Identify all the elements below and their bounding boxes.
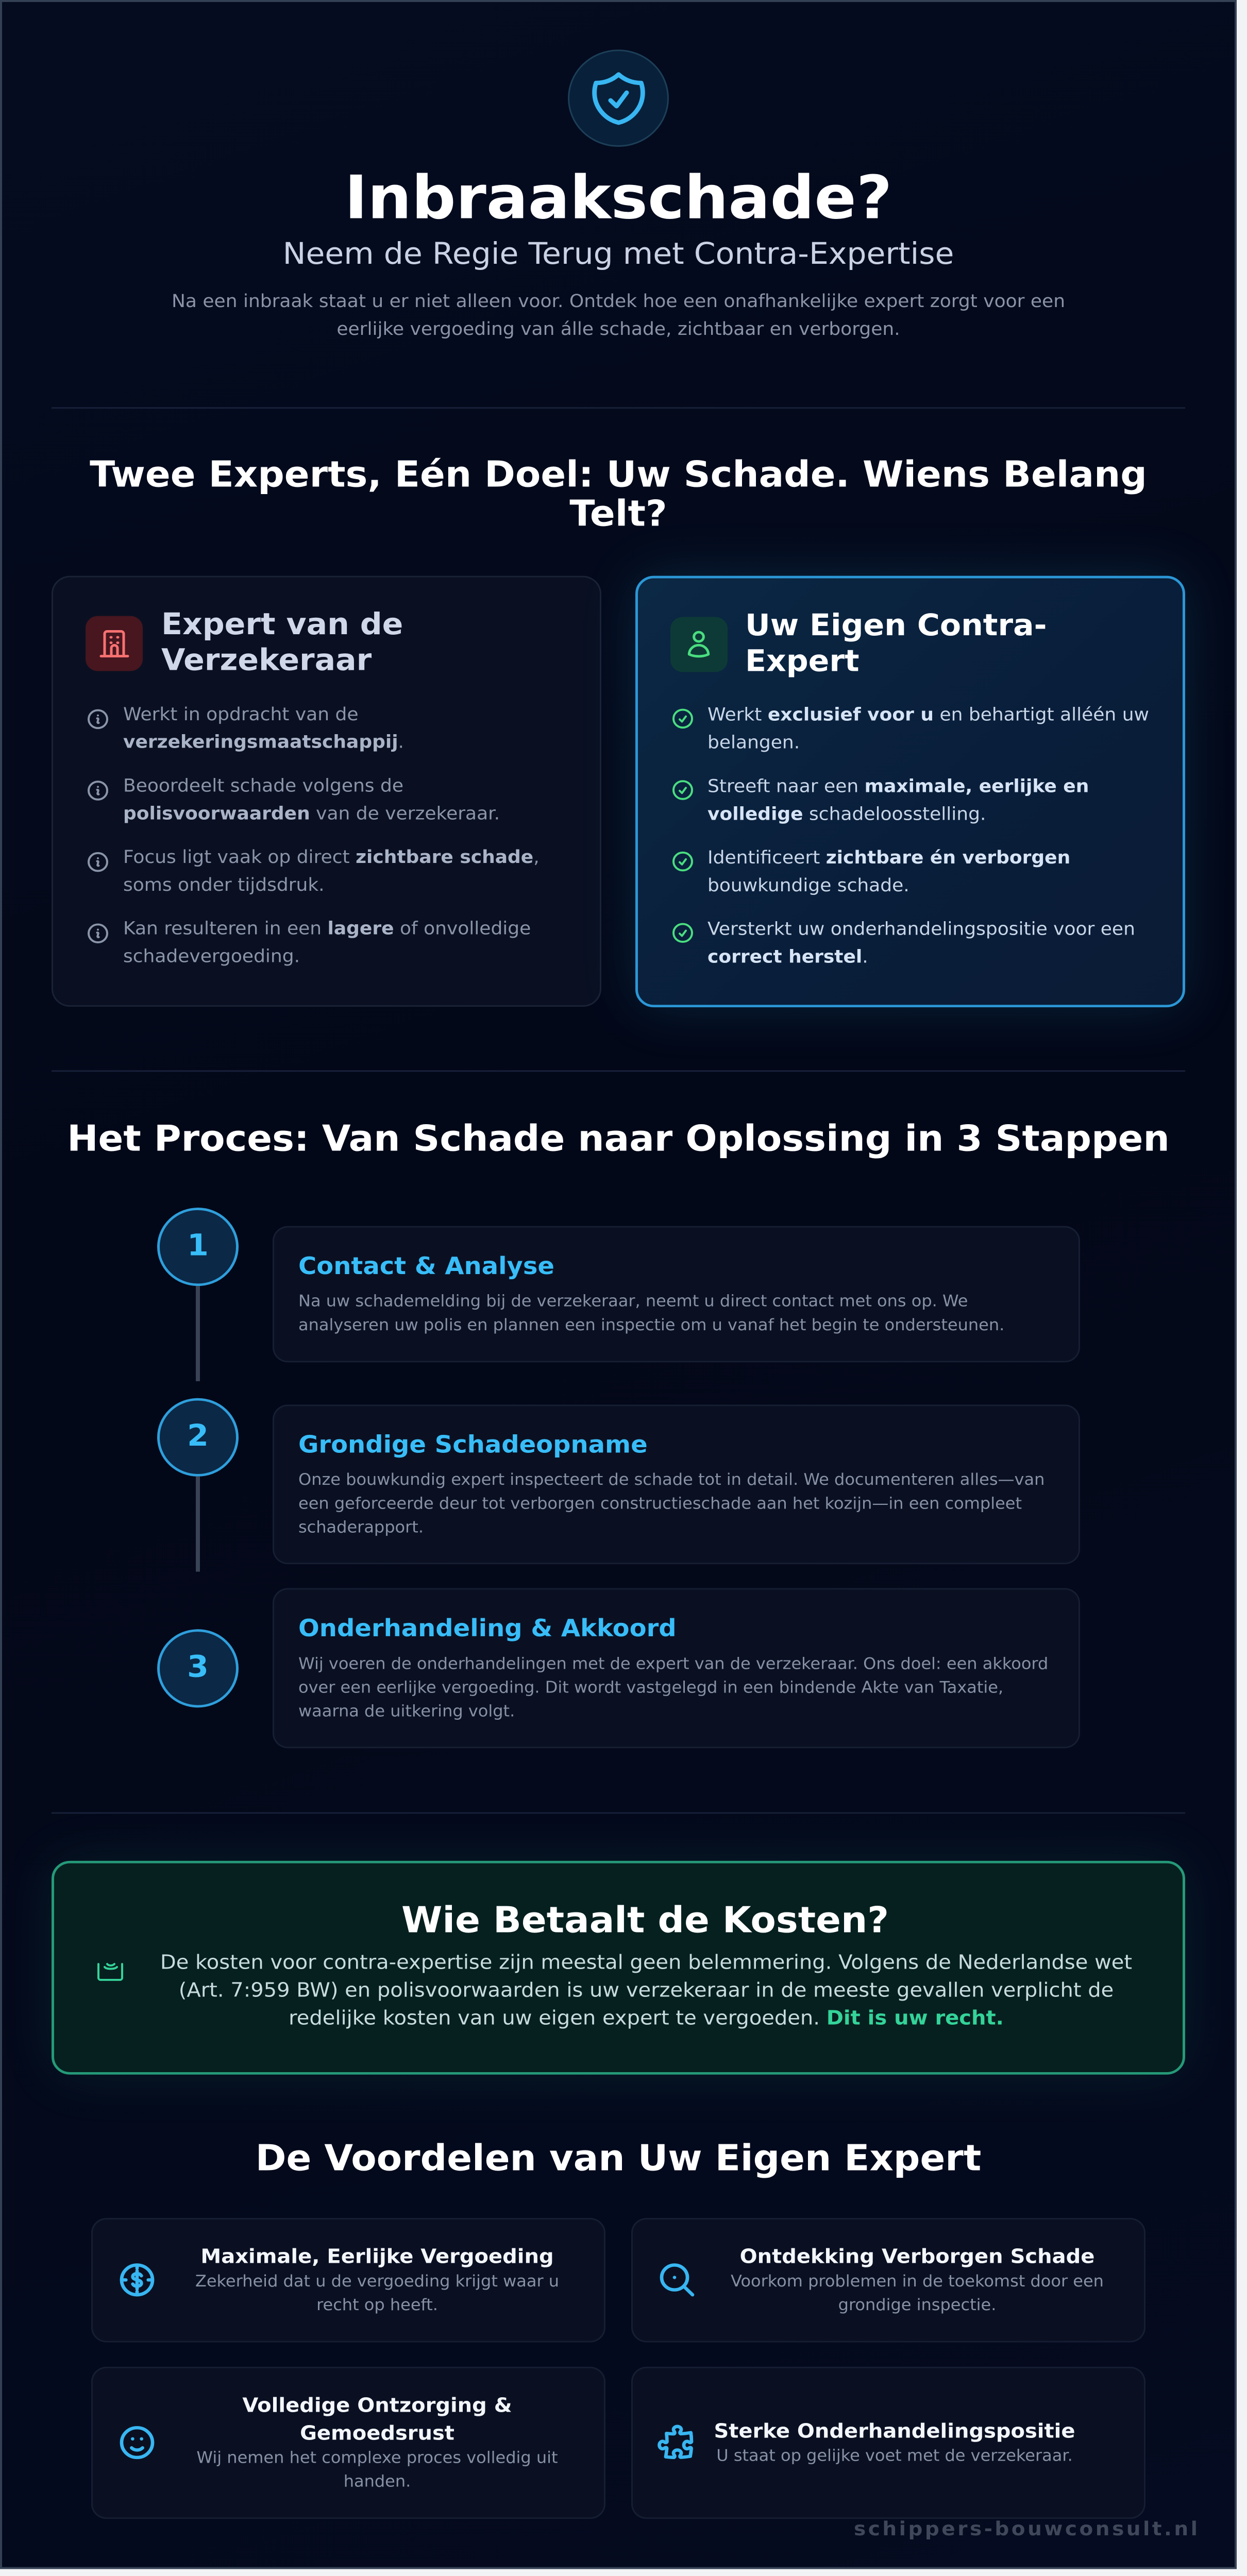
benefit text: grondige inspectie. bbox=[838, 2295, 996, 2314]
benefit text: Voorkom problemen in de toekomst door een bbox=[731, 2272, 1104, 2291]
heading: two experts: Twee Experts, Eén Doel: Uw Schade. Wiens Belang bbox=[90, 453, 1147, 495]
benefit title: Gemoedsrust bbox=[300, 2422, 454, 2445]
icon: dollar target bbox=[116, 2260, 158, 2300]
benefit text bbox=[171, 2446, 583, 2493]
step number 3: 3 bbox=[187, 1650, 209, 1684]
benefit title: Ontdekking Verborgen Schade bbox=[740, 2245, 1094, 2268]
text: Focus ligt vaak op direct zichtbare schade, bbox=[123, 847, 540, 868]
item 2 bbox=[88, 776, 500, 824]
icon: info bbox=[88, 781, 108, 801]
text: polisvoorwaarden van de verzekeraar. bbox=[123, 803, 500, 824]
step 1 bbox=[157, 1208, 1080, 1381]
benefit text: recht op heeft. bbox=[316, 2295, 438, 2314]
heading: insurer expert: Verzekeraar bbox=[161, 643, 372, 677]
text bbox=[707, 773, 1089, 828]
callout heading: Wie Betaalt de Kosten? bbox=[401, 1899, 889, 1941]
benefit title: Volledige Ontzorging & bbox=[242, 2394, 512, 2417]
header bbox=[172, 49, 1065, 339]
heading: contra expert bbox=[745, 608, 1047, 679]
text: correct herstel. bbox=[707, 947, 868, 967]
benefit title bbox=[171, 2392, 583, 2447]
item 3 bbox=[670, 844, 1160, 900]
text bbox=[123, 704, 404, 752]
icon: magnifier bbox=[656, 2260, 698, 2300]
step text: Wij voeren de onderhandelingen met de expert van de verzekeraar. Ons doel: een akkoord bbox=[298, 1654, 1048, 1673]
step number 1 bbox=[157, 1208, 239, 1286]
icon: check circle bbox=[670, 850, 695, 873]
text: Identificeert zichtbare én verborgen bbox=[707, 848, 1070, 868]
heading: insurer expert bbox=[161, 607, 403, 677]
text: volledige schadeloosstelling. bbox=[707, 804, 986, 824]
icon: user bbox=[670, 617, 728, 672]
watermark: schippers-bouwconsult.nl bbox=[854, 2518, 1200, 2540]
heading: insurer expert: Expert van de bbox=[161, 607, 403, 642]
heading: two experts: Telt? bbox=[569, 493, 667, 534]
panel: expert van de verzekeraar bbox=[52, 576, 601, 1007]
text bbox=[707, 705, 1149, 753]
step title: Onderhandeling & Akkoord bbox=[298, 1614, 677, 1642]
step text bbox=[298, 1652, 1048, 1723]
card: step 3 bbox=[273, 1588, 1080, 1748]
benefit card 4 bbox=[631, 2367, 1145, 2519]
intro text bbox=[172, 291, 1065, 339]
text: Streeft naar een maximale, eerlijke en bbox=[707, 776, 1089, 796]
text bbox=[123, 776, 500, 824]
intro text: Na een inbraak staat u er niet alleen voor. Ontdek hoe een onafhankelijke expert zorgt voor een bbox=[172, 291, 1065, 312]
card: step 1 bbox=[273, 1226, 1080, 1362]
step title: Contact & Analyse bbox=[298, 1252, 554, 1280]
icon: building bbox=[86, 616, 143, 671]
intro text: eerlijke vergoeding van álle schade, zichtbaar en verborgen. bbox=[336, 319, 900, 339]
subtitle: Neem de Regie Terug met Contra-Expertise bbox=[283, 236, 954, 272]
callout text: (Art. 7:959 BW) en polisvoorwaarden is uw verzekeraar in de meeste gevallen verplicht de bbox=[179, 1979, 1114, 2002]
heading: benefits: De Voordelen van Uw Eigen Expert bbox=[256, 2137, 981, 2179]
text: verzekeringsmaatschappij. bbox=[123, 732, 404, 752]
callout text: redelijke kosten van uw eigen expert te vergoeden. Dit is uw recht. bbox=[289, 2007, 1004, 2029]
item 4 bbox=[88, 919, 531, 967]
benefit title: Sterke Onderhandelingspositie bbox=[714, 2420, 1075, 2443]
benefit text bbox=[711, 2269, 1123, 2317]
text: bouwkundige schade. bbox=[707, 875, 909, 896]
benefit card 3 bbox=[91, 2367, 605, 2519]
text: Beoordeelt schade volgens de bbox=[123, 776, 403, 796]
text bbox=[123, 847, 540, 895]
icon: smile bbox=[116, 2423, 158, 2463]
benefit card 2 bbox=[631, 2218, 1145, 2343]
step number 2: 2 bbox=[187, 1418, 209, 1453]
icon: puzzle bbox=[655, 2423, 697, 2463]
item 1 bbox=[88, 704, 404, 752]
step text: Onze bouwkundig expert inspecteert de schade tot in detail. We documenteren alles—van bbox=[298, 1470, 1044, 1489]
panel: uw eigen contra-expert bbox=[635, 576, 1185, 1007]
step number 3 bbox=[157, 1629, 239, 1707]
panel: costs callout bbox=[52, 1861, 1185, 2075]
icon: wallet bbox=[97, 1963, 124, 1983]
icon: info bbox=[88, 709, 108, 730]
item 1 bbox=[672, 705, 1149, 753]
callout text: De kosten voor contra-expertise zijn meestal geen belemmering. Volgens de Nederlandse wet bbox=[160, 1951, 1132, 1974]
step text: schaderapport. bbox=[298, 1518, 424, 1536]
text bbox=[707, 844, 1070, 900]
text: Werkt exclusief voor u en behartigt alléén uw bbox=[707, 705, 1149, 725]
text bbox=[123, 919, 531, 967]
card: step 2 bbox=[273, 1404, 1080, 1564]
heading: contra expert: Uw Eigen Contra- bbox=[745, 608, 1047, 643]
step 2 bbox=[157, 1398, 1080, 1572]
text: belangen. bbox=[707, 733, 800, 753]
step 3 bbox=[157, 1588, 1080, 1748]
icon: check circle bbox=[670, 778, 695, 802]
step text bbox=[298, 1289, 1004, 1336]
step text: analyseren uw polis en plannen een inspectie om u vanaf het begin te ondersteunen. bbox=[298, 1315, 1004, 1334]
title: Inbraakschade? bbox=[345, 164, 892, 232]
step text bbox=[298, 1467, 1044, 1539]
step text: een geforceerde deur tot verborgen constructieschade aan het kozijn—in een compleet bbox=[298, 1494, 1022, 1513]
text: soms onder tijdsdruk. bbox=[123, 875, 325, 895]
step text: Na uw schademelding bij de verzekeraar, neemt u direct contact met ons op. We bbox=[298, 1292, 968, 1310]
step number 1: 1 bbox=[187, 1228, 209, 1263]
benefit text: handen. bbox=[344, 2472, 411, 2490]
step text: over een eerlijke vergoeding. Dit wordt vastgelegd in een bindende Akte van Taxatie, bbox=[298, 1678, 1003, 1697]
heading: two experts bbox=[90, 453, 1147, 534]
icon: check circle bbox=[672, 709, 693, 728]
text bbox=[707, 916, 1135, 971]
step number 2 bbox=[157, 1398, 239, 1477]
icon: info bbox=[88, 852, 108, 872]
icon: shield check bbox=[568, 49, 669, 147]
list: contra expert points bbox=[672, 705, 1149, 967]
text: Kan resulteren in een lagere of onvolledige bbox=[123, 919, 531, 939]
item 4 bbox=[670, 916, 1160, 971]
benefit text: U staat op gelijke voet met de verzekeraar. bbox=[716, 2446, 1073, 2465]
benefit card 1 bbox=[91, 2218, 605, 2343]
text: Werkt in opdracht van de bbox=[123, 704, 359, 724]
item 3 bbox=[88, 847, 540, 895]
benefit text bbox=[171, 2269, 583, 2317]
step text: waarna de uitkering volgt. bbox=[298, 1702, 515, 1720]
callout text bbox=[131, 1948, 1161, 2032]
list: insurer expert points bbox=[88, 704, 540, 967]
icon: check circle bbox=[670, 921, 695, 945]
icon: info bbox=[88, 923, 108, 943]
benefit title: Maximale, Eerlijke Vergoeding bbox=[200, 2245, 554, 2268]
heading: process: Het Proces: Van Schade naar Oplossing in 3 Stappen bbox=[67, 1117, 1170, 1159]
step title: Grondige Schadeopname bbox=[298, 1431, 648, 1459]
item 2 bbox=[672, 776, 1089, 824]
text: Versterkt uw onderhandelingspositie voor een bbox=[707, 919, 1135, 939]
benefit text: Wij nemen het complexe proces volledig uit bbox=[196, 2448, 558, 2467]
heading: contra expert: Expert bbox=[745, 644, 860, 679]
benefit text: Zekerheid dat u de vergoeding krijgt waar u bbox=[195, 2272, 559, 2291]
text: schadevergoeding. bbox=[123, 946, 300, 967]
